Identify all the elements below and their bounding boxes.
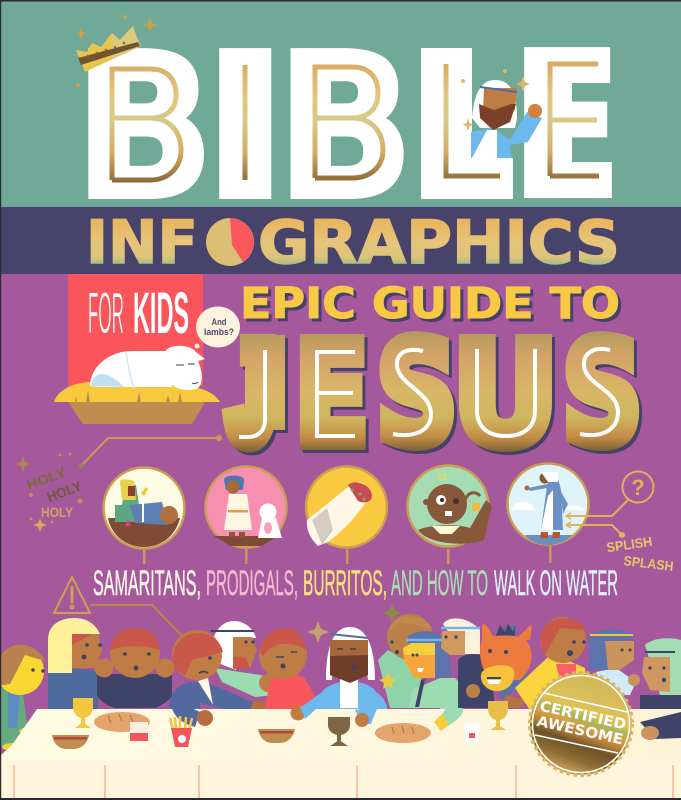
warning triangle callout bbox=[54, 577, 193, 647]
arms over table bbox=[170, 700, 681, 740]
purple background bbox=[0, 274, 681, 800]
icon circle: boy counting: 12 bbox=[437, 472, 447, 482]
second bowl bbox=[258, 729, 295, 743]
second bowl soup bbox=[260, 731, 293, 734]
stem bbox=[346, 549, 348, 564]
stem bbox=[549, 546, 552, 563]
french fries bbox=[170, 716, 192, 747]
figure: disciple in green headdress far right bbox=[640, 638, 681, 738]
takeout box bbox=[464, 723, 480, 743]
chalice bbox=[328, 717, 350, 746]
text: HOLY HOLY HOLY bbox=[16, 452, 85, 532]
bread loaf bbox=[94, 712, 150, 732]
icon circle: Samaritan bbox=[104, 468, 184, 548]
icon circle: walking on water bbox=[508, 464, 588, 545]
figure: disciple in red bbox=[259, 628, 315, 709]
heading: JESUS: E bbox=[295, 315, 368, 477]
icon: bearded man in title bbox=[461, 69, 542, 158]
bowl bbox=[52, 735, 89, 749]
gold goblet bbox=[73, 698, 93, 728]
figure: red-haired disciple in blue suit bbox=[169, 630, 267, 727]
title: BIBLE: B bbox=[278, 13, 412, 241]
stem bbox=[143, 549, 146, 564]
figure: blonde disciple bbox=[48, 618, 102, 709]
figure: Jesus bbox=[290, 627, 387, 725]
thought bubble: And lambs?: And bbox=[212, 317, 227, 328]
text: HOLY HOLY HOLY: HOLY bbox=[24, 464, 69, 493]
title: BIBLE bbox=[76, 12, 620, 242]
heading: JESUS: U bbox=[454, 313, 557, 476]
question mark callout with connector lines: ? bbox=[631, 475, 645, 500]
text: HOLY HOLY HOLY: HOLY bbox=[41, 504, 74, 520]
tagline bbox=[93, 564, 618, 603]
illustration: sleeping lamb in manger bbox=[54, 346, 220, 424]
figure: green-armed disciple in headdress bbox=[210, 621, 277, 697]
tagline: SAMARITANS, bbox=[93, 564, 201, 603]
second bread loaf bbox=[375, 723, 431, 743]
figure: donkey bbox=[480, 624, 532, 708]
title: BIBLE: E bbox=[513, 12, 620, 240]
thought bubble: And lambs? bbox=[194, 306, 240, 348]
subtitle: INFOGRAPHICS bbox=[86, 208, 620, 278]
subtitle: INFOGRAPHICS: INF bbox=[86, 208, 198, 278]
stem bbox=[447, 549, 450, 564]
question mark callout with connector lines bbox=[566, 472, 654, 537]
thought bubble: And lambs?: lambs? bbox=[204, 327, 234, 338]
tagline: PRODIGALS, bbox=[206, 564, 298, 603]
title: BIBLE: B bbox=[76, 14, 213, 242]
text: SPLISH SPLASH: SPLISH bbox=[606, 534, 653, 555]
table items bbox=[52, 698, 508, 749]
milk carton bbox=[130, 722, 148, 741]
red series tab with FOR KIDS bbox=[68, 274, 203, 386]
heading: JESUS: J bbox=[226, 310, 277, 474]
figure: disciple with raised hands bbox=[94, 628, 174, 708]
decorative gold stars bbox=[307, 604, 401, 643]
gold inline strokes on title bbox=[112, 64, 599, 180]
navy band bbox=[0, 207, 681, 274]
figure: disciple in blue headdress bbox=[403, 631, 463, 729]
figure: disciple with pale blue sleeve bbox=[589, 629, 640, 695]
white inline strokes on JESUS bbox=[239, 349, 618, 437]
figure: disciple in yellow bbox=[515, 617, 590, 710]
tagline: AND HOW TO bbox=[391, 564, 488, 603]
pie chart letter O bbox=[206, 218, 254, 266]
icon circle: burrito bbox=[306, 466, 387, 548]
icon: crown bbox=[76, 15, 157, 87]
red series tab with FOR KIDS: FOR bbox=[88, 281, 124, 346]
text: HOLY HOLY HOLY: HOLY bbox=[45, 477, 85, 505]
text: SPLISH SPLASH bbox=[606, 534, 674, 574]
heading: EPIC GUIDE TO: EPIC GUIDE TO bbox=[240, 279, 620, 329]
second gold goblet bbox=[488, 701, 508, 730]
icon circle: boy counting bbox=[408, 466, 492, 546]
figure: kid at far left bbox=[0, 645, 45, 751]
bowl soup bbox=[54, 737, 87, 740]
title: BIBLE: L bbox=[411, 13, 511, 241]
red series tab with FOR KIDS: KIDS bbox=[133, 281, 189, 346]
apostles and figures behind table bbox=[0, 614, 681, 751]
heading: JESUS: S bbox=[377, 312, 457, 475]
tagline: BURRITOS, bbox=[303, 564, 387, 603]
text: SPLISH SPLASH: SPLASH bbox=[623, 553, 674, 574]
figure: disciple in green with star bbox=[378, 614, 433, 708]
certified awesome seal bbox=[530, 673, 632, 775]
title: BIBLE: I bbox=[203, 14, 288, 242]
subtitle: INFOGRAPHICS: GRAPHICS bbox=[258, 208, 620, 278]
icon circle: Prodigal bbox=[206, 466, 286, 548]
heading: JESUS: S bbox=[563, 312, 642, 475]
figure: disciple in cream headdress bbox=[441, 618, 495, 708]
stem bbox=[245, 549, 248, 564]
certified awesome seal: CERTIFIED bbox=[538, 699, 628, 733]
heading: JESUS bbox=[226, 310, 642, 477]
banquet table bbox=[0, 709, 681, 800]
leader line from JESUS to HOLY bbox=[78, 436, 221, 468]
certified awesome seal: AWESOME bbox=[535, 714, 625, 748]
teal title background bbox=[0, 0, 681, 207]
